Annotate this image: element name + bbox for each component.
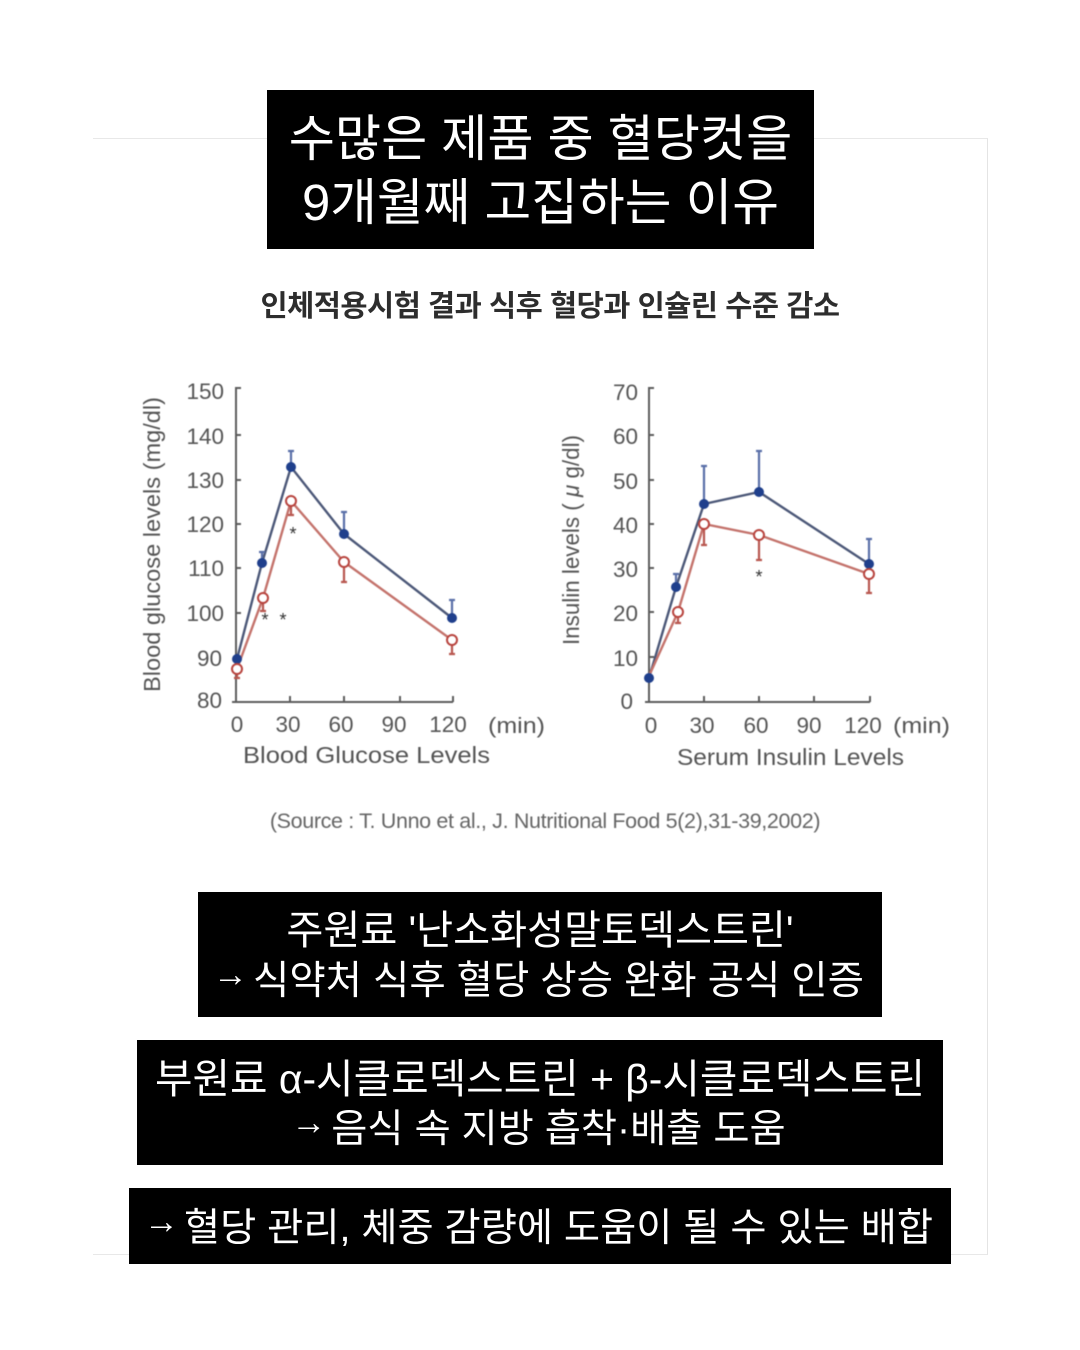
chart: blood glucose: 0 <box>231 712 243 737</box>
chart: serum insulin: 30 <box>689 713 715 738</box>
chart: serum insulin: 40 <box>613 513 638 538</box>
chart: blood glucose <box>139 379 545 768</box>
panel: card outline <box>93 138 988 1255</box>
callout: main ingredient <box>198 892 882 1017</box>
chart: blood glucose: 80 <box>197 688 222 713</box>
chart: blood glucose: 140 <box>186 424 224 449</box>
chart: blood glucose: 120 <box>186 512 224 537</box>
chart: blood glucose: 90 <box>381 712 407 737</box>
chart: blood glucose: 110 <box>188 556 224 581</box>
chart: serum insulin: 20 <box>613 601 638 626</box>
chart: serum insulin: * <box>755 567 763 587</box>
chart: serum insulin: 90 <box>796 713 822 738</box>
charts <box>139 379 950 834</box>
chart: blood glucose: (min) <box>488 713 545 738</box>
title: 9개월째 고집하는 이유 <box>302 174 779 231</box>
callout: sub ingredient: → 음식 속 지방 흡착·배출 도움 <box>291 1103 786 1151</box>
callout: main ingredient: 주원료 '난소화성말토덱스트린' <box>286 908 794 953</box>
title <box>267 90 814 249</box>
callout: sub ingredient: 부원료 α-시클로덱스트린 + β-시클로덱스트린 <box>155 1056 925 1102</box>
chart: serum insulin <box>558 380 950 770</box>
chart: blood glucose: 150 <box>186 379 224 404</box>
chart: blood glucose: 30 <box>275 712 301 737</box>
chart: serum insulin: 70 <box>613 380 638 405</box>
chart: blood glucose: * <box>289 524 297 544</box>
chart: blood glucose: Blood Glucose Levels <box>243 742 490 768</box>
chart: serum insulin: 60 <box>613 424 638 449</box>
chart: serum insulin: 60 <box>743 713 769 738</box>
chart: serum insulin: 0 <box>620 689 633 714</box>
chart: blood glucose: 100 <box>186 601 224 626</box>
chart: blood glucose: * <box>279 610 287 630</box>
callout: main ingredient: → 식약처 식후 혈당 상승 완화 공식 인증 <box>213 955 864 1003</box>
chart: blood glucose: 120 <box>429 712 467 737</box>
chart: blood glucose: 60 <box>328 712 354 737</box>
chart: serum insulin: 120 <box>844 713 882 738</box>
chart: serum insulin: (min) <box>893 713 950 738</box>
chart heading: 인체적용시험 결과 식후 혈당과 인슐린 수준 감소 <box>260 290 839 323</box>
callout: conclusion: → 혈당 관리, 체중 감량에 도움이 될 수 있는 배합 <box>144 1202 933 1250</box>
title: 수많은 제품 중 혈당컷을 <box>289 111 792 167</box>
chart: blood glucose: * <box>261 610 269 630</box>
chart: serum insulin: Insulin levels ( μ g/dl) <box>558 435 584 645</box>
chart: serum insulin: Serum Insulin Levels <box>677 744 904 770</box>
chart: blood glucose: 90 <box>197 646 222 671</box>
chart: blood glucose: 130 <box>186 468 224 493</box>
chart: serum insulin: 50 <box>613 469 638 494</box>
chart: serum insulin: 10 <box>613 646 638 671</box>
chart: blood glucose: Blood glucose levels (mg/dl) <box>139 397 165 692</box>
source citation: (Source : T. Unno et al., J. Nutritional Food 5(2),31-39,2002) <box>270 809 820 833</box>
chart: serum insulin: 0 <box>645 713 657 738</box>
callout: sub ingredient <box>137 1040 943 1165</box>
callout: conclusion <box>129 1188 951 1264</box>
chart: serum insulin: 30 <box>613 557 638 582</box>
